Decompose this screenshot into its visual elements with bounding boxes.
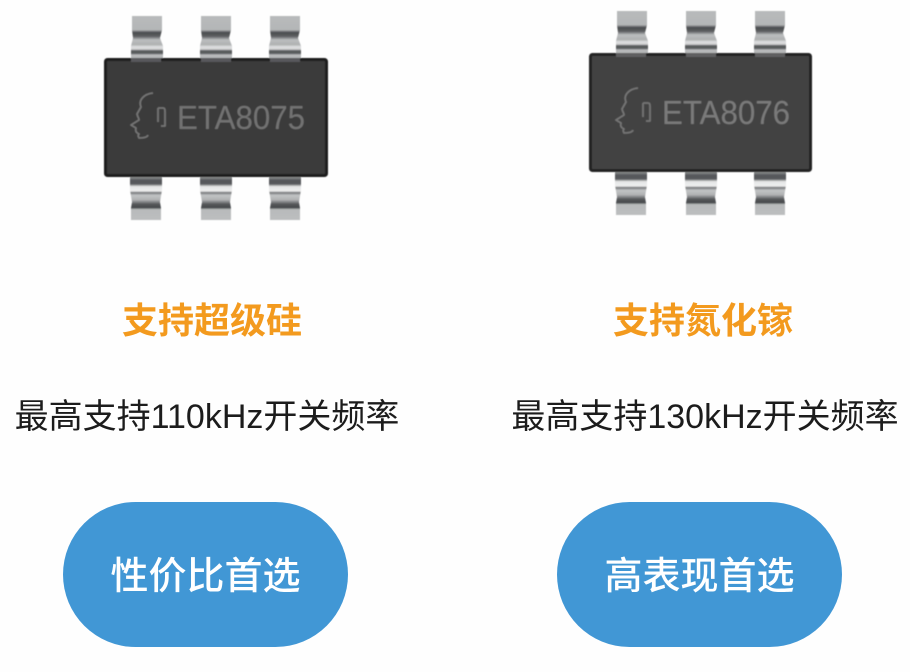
- pin shoulders: [616, 53, 785, 57]
- button: right: 高表现首选: [604, 556, 794, 598]
- pins: bottom row: [615, 171, 786, 215]
- pins: bottom row: [130, 176, 301, 220]
- chip: ETA8075: [106, 16, 326, 220]
- chips illustration: [103, 10, 813, 220]
- pins: top row: [131, 16, 301, 62]
- pins: top row: [616, 11, 786, 57]
- part number: ETA8076: [662, 94, 790, 131]
- heading: left: 支持超级硅: [122, 300, 302, 341]
- button: right: [557, 502, 842, 647]
- logo: [616, 88, 650, 133]
- chip body: [590, 54, 810, 170]
- button: left: 性价比首选: [110, 556, 300, 598]
- pin shoulders: [131, 58, 300, 62]
- description: right: 最高支持130kHz开关频率: [511, 398, 899, 436]
- button: left: [63, 502, 348, 647]
- description: left: 最高支持110kHz开关频率: [15, 398, 399, 436]
- heading: right: 支持氮化镓: [613, 300, 793, 341]
- chip body: [106, 60, 326, 176]
- part number: ETA8075: [177, 99, 305, 136]
- chip: ETA8076: [590, 11, 810, 215]
- logo: [131, 93, 165, 138]
